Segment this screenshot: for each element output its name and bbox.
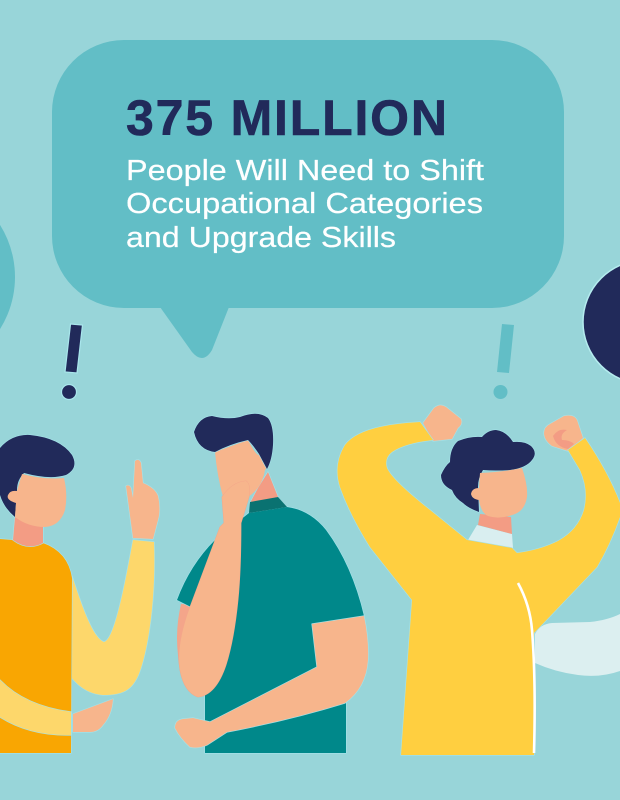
person: right, arms raised [337, 405, 620, 755]
right person left fist [423, 405, 462, 441]
subheading text: People Will Need to Shift [126, 155, 484, 187]
right person sweater [337, 422, 620, 755]
left person raised hand [126, 460, 160, 539]
right person right fist [544, 416, 583, 451]
partial dark circle at right edge [583, 260, 620, 384]
main speech bubble [52, 40, 564, 358]
left person torso [0, 539, 72, 753]
left person raised sleeve [71, 540, 154, 695]
right person neck [478, 514, 512, 534]
middle person hair [194, 414, 273, 469]
pale sleeve of off-screen person [535, 614, 620, 676]
exclamation mark: navy [62, 324, 82, 400]
middle person shirt [177, 507, 364, 753]
middle person collar [249, 497, 287, 513]
middle person back arm shadow [177, 604, 210, 697]
left person hair [0, 435, 74, 517]
headline: 375 MILLION: 375 MILLION [126, 90, 447, 146]
subheading text [126, 155, 484, 254]
right person white sweater seam [518, 583, 535, 753]
exclamation mark: teal [494, 324, 514, 399]
right person face [471, 468, 527, 518]
middle person face [215, 440, 270, 497]
partial speech bubble at left edge [0, 179, 15, 375]
subheading text: and Upgrade Skills [126, 222, 396, 254]
right person right fist fingers [553, 430, 574, 449]
middle person raised forearm and hand [179, 481, 250, 697]
right person collar [468, 525, 513, 548]
left person lower sleeve [0, 680, 71, 735]
middle person supporting arm [175, 616, 368, 748]
left person face [8, 474, 66, 527]
left person lower hand [73, 699, 113, 732]
person: middle, thinking [175, 414, 368, 753]
middle person neck [250, 472, 278, 503]
right person hair [441, 430, 535, 512]
left person neck [13, 517, 43, 546]
subheading text: Occupational Categories [126, 188, 483, 220]
person: left, pointing [0, 435, 160, 753]
